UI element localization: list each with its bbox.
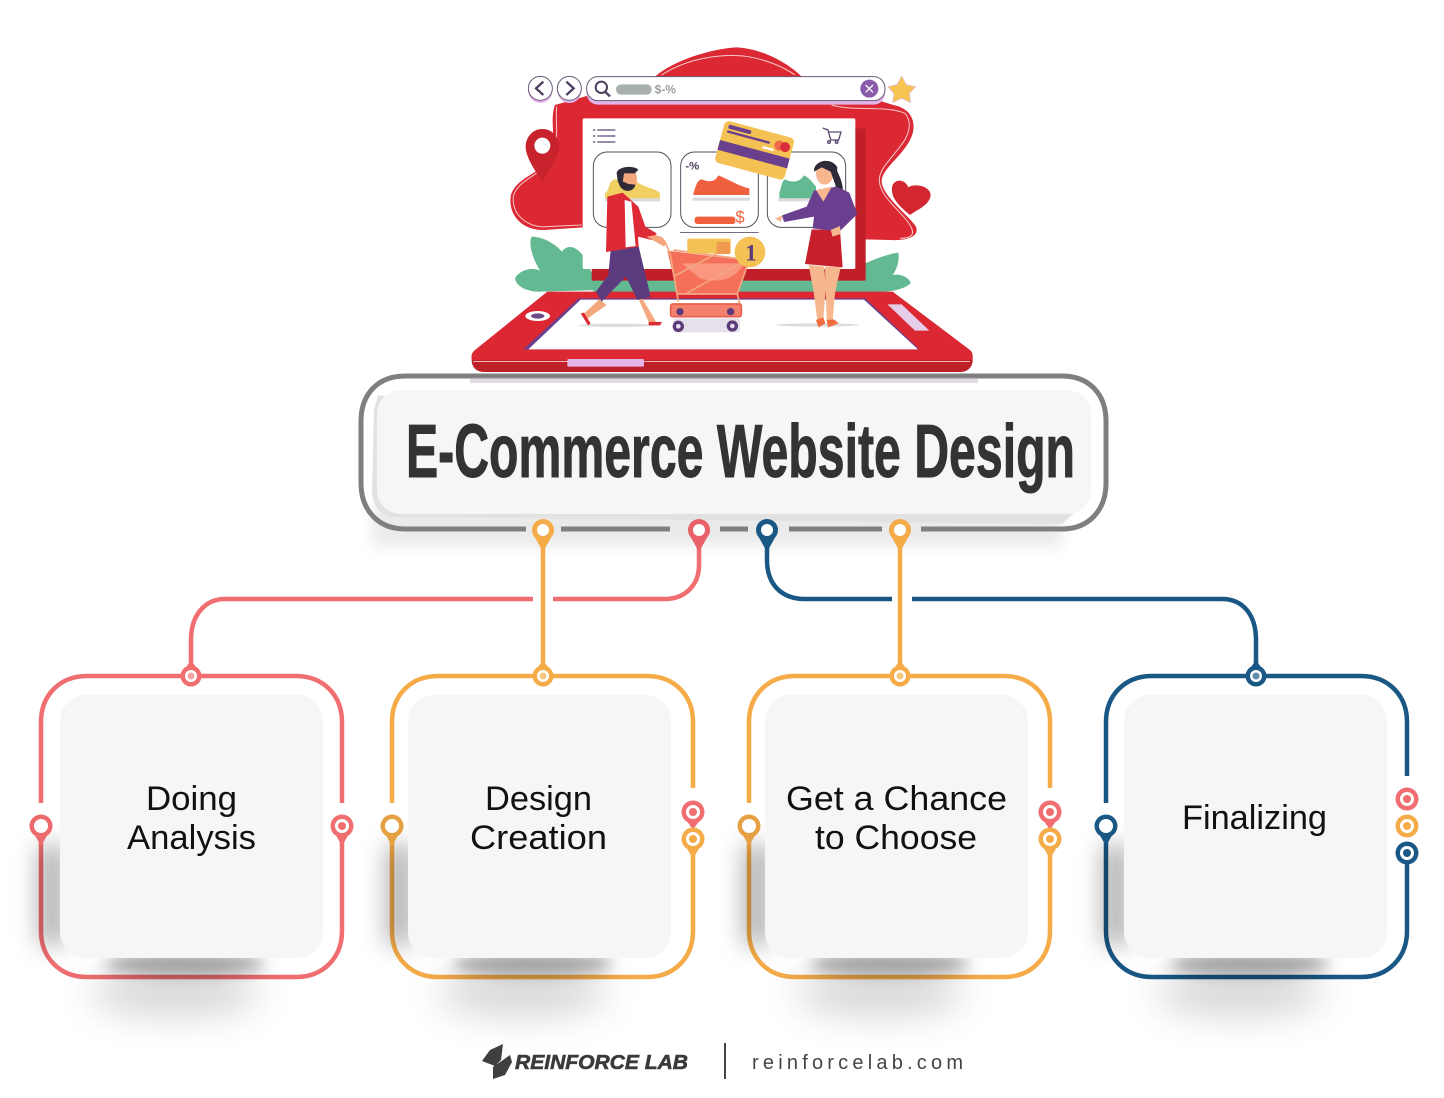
top node — [532, 660, 554, 686]
illustration: online shopping on a laptop — [471, 47, 973, 372]
map pin — [526, 129, 559, 183]
card — [1124, 695, 1387, 958]
connector: orange right — [898, 530, 902, 676]
top node — [1246, 660, 1266, 686]
card text: Finalizing — [1182, 799, 1327, 837]
product card: orange shoe: $ — [735, 208, 745, 227]
title outline — [361, 376, 1106, 529]
footer url: reinforcelab.com — [752, 1052, 963, 1074]
shopping cart — [655, 237, 749, 332]
card outline — [392, 676, 693, 977]
top node — [180, 660, 202, 686]
left node — [738, 814, 760, 846]
card text: Design — [485, 780, 592, 818]
card text: Get a Chance — [786, 780, 1007, 818]
title inner shade — [372, 395, 1082, 524]
product card: orange shoe: -% — [685, 160, 699, 172]
browser window — [583, 118, 855, 269]
menu icon — [593, 130, 615, 142]
left node — [380, 814, 404, 846]
connector: coral — [191, 530, 699, 676]
ground shadows — [578, 318, 859, 332]
top node — [890, 660, 910, 686]
card outline — [1106, 676, 1407, 977]
card — [765, 695, 1028, 958]
badge: 1 — [735, 237, 765, 267]
panel: get a chance to choose — [738, 660, 1062, 1016]
logo wordmark: REINFORCE LAB — [515, 1052, 688, 1074]
product card: green shoe — [767, 152, 846, 227]
card text: Doing — [146, 780, 237, 818]
card outline — [41, 676, 342, 977]
product card: orange shoe — [681, 152, 758, 227]
red background blob — [510, 47, 917, 240]
card shadow — [386, 845, 613, 1016]
card outline — [749, 676, 1050, 977]
card — [408, 695, 671, 958]
right node: coral — [682, 800, 704, 830]
right node: navy — [1396, 842, 1418, 864]
card shadow — [743, 845, 970, 1016]
title inner card — [377, 390, 1091, 514]
right node — [330, 814, 354, 846]
laptop screen back — [592, 128, 866, 281]
card shadow — [38, 845, 265, 1016]
title shadow — [372, 505, 1062, 547]
panel: finalizing — [1094, 660, 1418, 1016]
plant: left — [515, 237, 600, 292]
search bar: $-% — [655, 83, 676, 97]
blob highlight lines — [513, 56, 913, 238]
connector: orange left — [541, 530, 545, 676]
right node: coral — [1038, 800, 1062, 830]
card text: Creation — [470, 819, 607, 857]
title node: orange — [532, 519, 554, 552]
man — [581, 167, 667, 325]
logo mark — [482, 1044, 512, 1079]
search bar — [587, 77, 885, 105]
back button — [528, 76, 552, 103]
right node: orange — [1038, 828, 1062, 859]
credit card — [714, 120, 795, 181]
plant: right — [865, 253, 911, 292]
title text: E-Commerce Website Design — [406, 409, 1075, 493]
panel: design creation — [380, 660, 704, 1016]
left node — [1094, 814, 1118, 846]
title node: coral — [688, 519, 710, 552]
product card: yellow shoe — [593, 152, 671, 227]
woman — [775, 161, 857, 327]
card — [60, 695, 323, 958]
title node: navy — [756, 519, 778, 552]
right node: orange — [1396, 814, 1418, 838]
right node: orange — [682, 828, 704, 859]
card text: to Choose — [815, 819, 977, 857]
laptop base — [471, 292, 973, 372]
forward button — [557, 76, 581, 103]
divider under card — [680, 231, 759, 234]
green strip — [593, 281, 867, 293]
footer divider — [724, 1043, 726, 1079]
card text: Analysis — [127, 819, 256, 857]
panel: doing analysis — [30, 660, 354, 1016]
badge: 1: 1 — [745, 241, 757, 267]
star — [888, 76, 916, 103]
cart icon — [823, 128, 841, 143]
footer logo — [482, 1044, 688, 1079]
laptop drop shadow — [470, 377, 978, 383]
card shadow — [1102, 845, 1330, 1016]
left node — [30, 814, 52, 846]
heart — [892, 181, 931, 215]
title panel — [361, 376, 1106, 529]
right node: coral — [1396, 788, 1418, 810]
connector: navy — [767, 530, 1256, 676]
title node: orange — [889, 519, 911, 552]
